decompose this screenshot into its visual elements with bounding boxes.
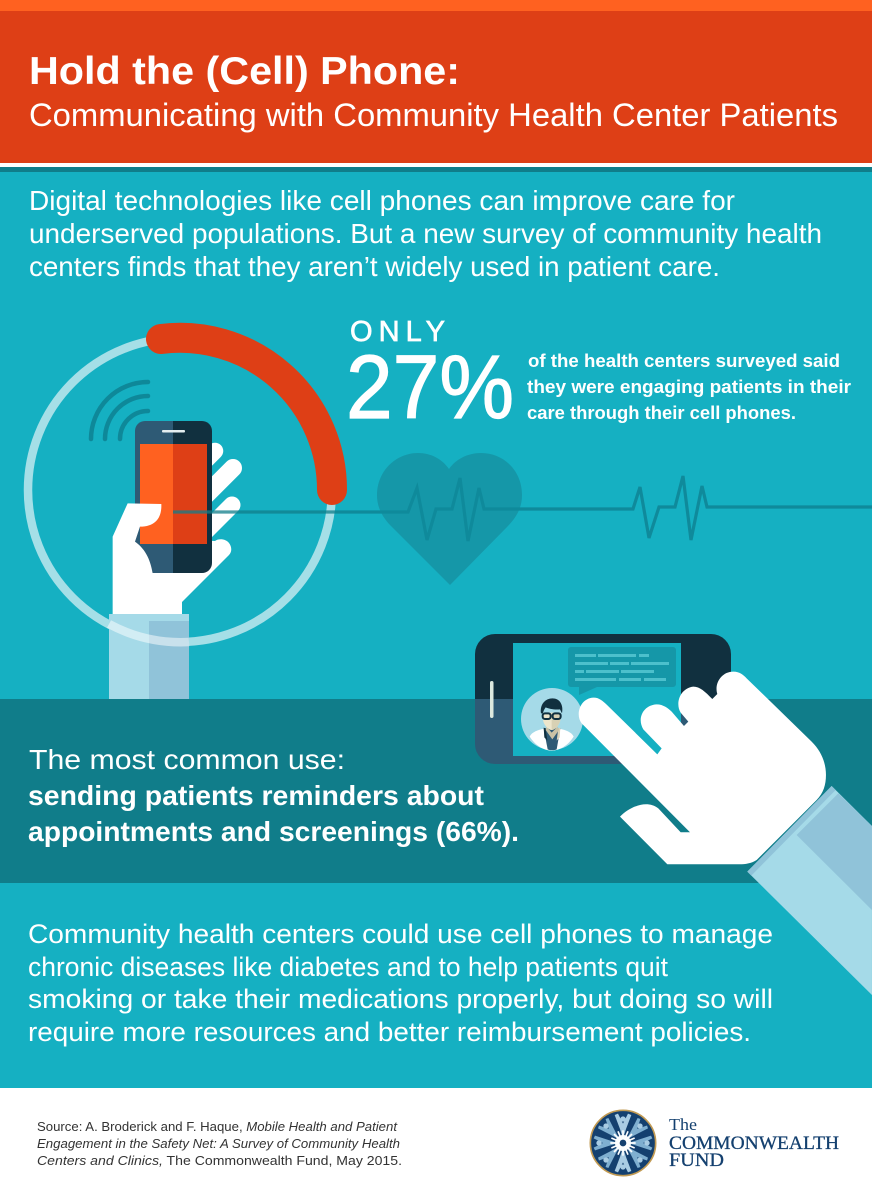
logo: seal [590,1110,656,1176]
stat description: of the health centers surveyed said [528,351,840,371]
back of hand [113,539,231,615]
stat: only 27%: 27% [346,338,514,438]
panel: header [0,0,872,163]
logo: wordmark: The [669,1115,697,1134]
logo: wordmark: FUND [669,1150,724,1171]
text: recommendations: require more resources and better reimbursement policies. [28,1017,751,1047]
progress ring [28,338,332,642]
wifi signal [91,382,148,439]
phone body [135,421,212,573]
icon: pointing hand and sleeve [579,672,872,995]
panel: footer [0,1088,872,1200]
source citation [37,1120,402,1168]
stat: only 27% [346,316,851,438]
heartbeat line [173,476,872,541]
text: most common use: sending patients reminders about [28,780,484,811]
text: most common use: The most common use: [29,744,345,775]
icon: tablet phone with doctor message [475,634,731,764]
stat description: they were engaging patients in their [527,377,851,397]
intro text: Digital technologies like cell phones can improve care for [29,185,735,216]
stat: only 27%: ONLY [350,316,445,348]
big sleeve [747,786,872,995]
text: most common use [28,744,519,847]
band: most common use [0,699,872,883]
palm and thumb [113,503,167,615]
fingers [200,451,233,537]
source citation: Engagement in the Safety Net: A Survey of Community Health [37,1137,400,1151]
icon: hand holding phone [28,338,332,699]
title: Hold the (Cell) Phone: [29,50,460,93]
text: recommendations: smoking or take their medications properly, but doing so will [28,984,773,1014]
sleeve [109,614,189,699]
doctor avatar [521,688,583,751]
stat description: care through their cell phones. [527,403,796,423]
logo: wordmark [669,1115,839,1171]
logo: wordmark: COMMONWEALTH [669,1133,839,1154]
text: recommendations: Community health centers could use cell phones to manage [28,919,773,949]
text: recommendations: chronic diseases like diabetes and to help patients quit [28,952,668,982]
big hand [579,672,826,864]
text: recommendations [28,919,773,1047]
text: most common use: appointments and screenings (66%). [28,816,519,847]
source citation: Source: A. Broderick and F. Haque, Mobile Health and Patient [37,1120,398,1134]
subtitle: Communicating with Community Health Center Patients [29,97,838,133]
speech bubble [568,647,676,695]
source citation: Centers and Clinics, The Commonwealth Fund, May 2015. [37,1154,402,1168]
intro text: underserved populations. But a new survey of community health [29,218,822,249]
progress arc 27% [161,338,332,490]
intro text [29,185,822,282]
stat description [527,351,851,423]
intro text: centers finds that they aren’t widely used in patient care. [29,251,720,282]
icon: heart [377,453,522,585]
